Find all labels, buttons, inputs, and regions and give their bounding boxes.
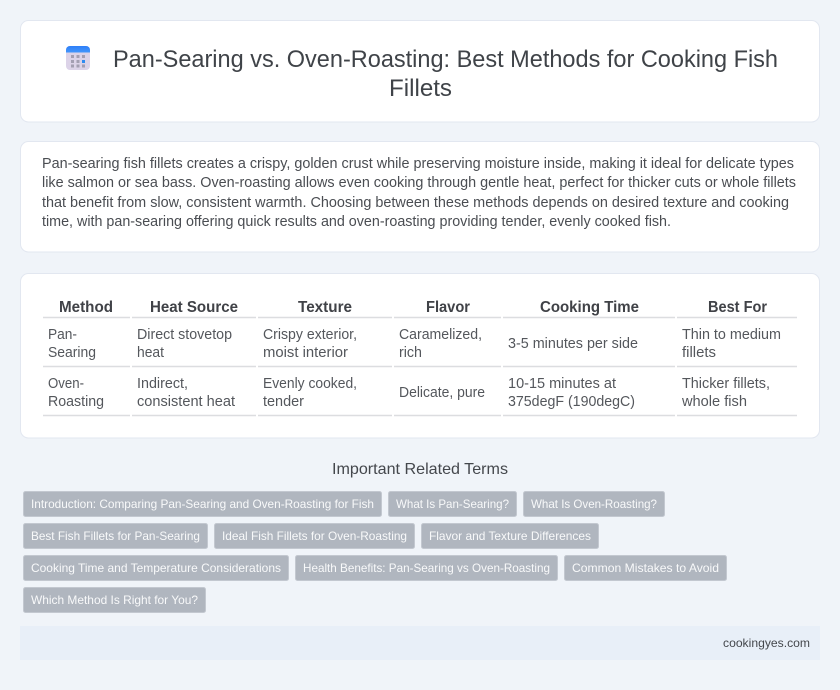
table row: oven-roasting: Delicate, pure [399, 385, 485, 401]
related term tags [24, 492, 726, 612]
panel: introduction text: time, with pan-searing offering quick results and oven-roasting providing tender, evenly cooked fish. [42, 214, 671, 230]
table header row: Flavor [426, 299, 470, 316]
table row: pan-searing: Pan- [48, 327, 77, 343]
table header row: Heat Source [150, 299, 238, 316]
table header row: Texture [298, 299, 352, 316]
table header row: Best For [708, 299, 767, 316]
table row: oven-roasting: Oven- [48, 376, 84, 392]
table row: oven-roasting: Evenly cooked, [263, 376, 357, 392]
related term tags: Common Mistakes to Avoid [572, 561, 719, 575]
related term tags: What Is Oven-Roasting? [531, 497, 657, 511]
footer: cookingyes.com [723, 636, 810, 650]
table header row: Method [59, 299, 113, 316]
table row: pan-searing: rich [399, 345, 422, 361]
footer [20, 626, 820, 660]
panel: introduction text: Pan-searing fish fillets creates a crispy, golden crust while preserving moisture inside, making it ideal for delicate types [42, 156, 794, 172]
table row: pan-searing: Searing [48, 345, 96, 361]
table row: oven-roasting: consistent heat [137, 394, 235, 410]
table header row [59, 299, 767, 316]
table row: oven-roasting: whole fish [681, 394, 747, 410]
title [113, 46, 778, 102]
table row: pan-searing [48, 327, 781, 361]
table row: oven-roasting: Roasting [48, 394, 104, 410]
table row: pan-searing: fillets [682, 345, 716, 361]
title: Fillets [389, 75, 452, 102]
panel: header [20, 20, 820, 122]
table row: pan-searing: 3-5 minutes per side [508, 336, 638, 352]
table row: oven-roasting [48, 376, 770, 410]
table row: oven-roasting: Thicker fillets, [682, 376, 770, 392]
icon: calendar [66, 46, 90, 70]
related term tags: Best Fish Fillets for Pan-Searing [31, 529, 200, 543]
related term tags: Introduction: Comparing Pan-Searing and Oven-Roasting for Fish [31, 497, 374, 511]
related term tags: Flavor and Texture Differences [429, 529, 591, 543]
related term tags: What Is Pan-Searing? [396, 497, 509, 511]
related term tags: Ideal Fish Fillets for Oven-Roasting [222, 529, 407, 543]
table row: oven-roasting: Indirect, [137, 376, 188, 392]
table row: pan-searing: Direct stovetop [137, 327, 232, 343]
table row: pan-searing: Thin to medium [682, 327, 781, 343]
table row: pan-searing: moist interior [263, 345, 348, 361]
panel: introduction text: that benefit from slow, consistent warmth. Choosing between these methods depends on desired texture and cooking [42, 195, 789, 211]
table header row: Cooking Time [540, 299, 639, 316]
table row: oven-roasting: tender [263, 394, 304, 410]
related term tags: Health Benefits: Pan-Searing vs Oven-Roasting [303, 561, 550, 575]
title: Pan-Searing vs. Oven-Roasting: Best Methods for Cooking Fish [113, 46, 778, 73]
table row: oven-roasting: 375degF (190degC) [508, 394, 635, 410]
table row: oven-roasting: 10-15 minutes at [508, 376, 616, 392]
related term tags: Which Method Is Right for You? [31, 593, 198, 607]
table row: pan-searing: Caramelized, [399, 327, 482, 343]
table row: pan-searing: Crispy exterior, [263, 327, 357, 343]
related term tags: Cooking Time and Temperature Considerations [31, 561, 281, 575]
panel: introduction text: like salmon or sea bass. Oven-roasting allows even cooking through gentle heat, perfect for thicker cuts or whole fillets [42, 175, 796, 191]
panel: introduction text [20, 142, 820, 252]
panel: comparison table [20, 274, 820, 438]
heading: important related terms: Important Related Terms [332, 461, 508, 478]
table row: pan-searing: heat [137, 345, 164, 361]
